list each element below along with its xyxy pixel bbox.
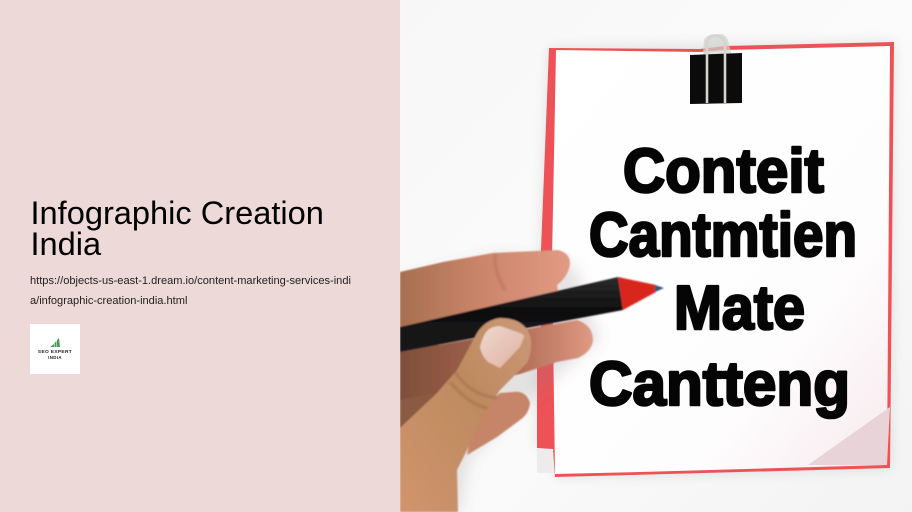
- note handwritten words: Mate: [674, 274, 805, 343]
- logo: SEO Expert India: SEO EXPERT: [38, 349, 72, 355]
- note handwritten words: Conteit: [623, 137, 824, 206]
- ring finger: [467, 392, 530, 455]
- thumb nail: [480, 326, 524, 368]
- thumb knuckle creases: [450, 372, 497, 408]
- note handwritten words: [589, 137, 857, 419]
- title: [30, 194, 324, 262]
- index finger: [400, 250, 570, 335]
- panel: photo of hand pointing a pen at a clipped note: [400, 0, 912, 512]
- binder clip: [690, 34, 742, 104]
- hand holding pen: [400, 250, 664, 512]
- note handwritten words: Cantmtien: [589, 201, 857, 270]
- pen body: [400, 277, 623, 352]
- source URL: https://objects-us-east-1.dream.io/content-marketing-services-indi: [30, 275, 351, 287]
- source URL: [30, 275, 351, 307]
- middle finger: [400, 320, 593, 400]
- pen blue point: [655, 285, 664, 292]
- logo: SEO Expert India: INDIA: [48, 355, 62, 360]
- title: Infographic Creation: [30, 194, 324, 231]
- title: India: [30, 224, 101, 262]
- source URL: a/infographic-creation-india.html: [30, 295, 187, 307]
- panel: left text panel: [0, 0, 400, 512]
- note handwritten words: Cantteng: [589, 350, 850, 419]
- photo background: [400, 0, 912, 512]
- hand shadow: [400, 255, 600, 512]
- thumb and wrist: [400, 318, 531, 512]
- index finger crease: [495, 254, 505, 290]
- note paper: [537, 42, 894, 477]
- pen red tip: [618, 277, 656, 310]
- logo: SEO Expert India: [30, 324, 80, 374]
- page curl: [808, 407, 890, 465]
- palm shade: [400, 345, 480, 430]
